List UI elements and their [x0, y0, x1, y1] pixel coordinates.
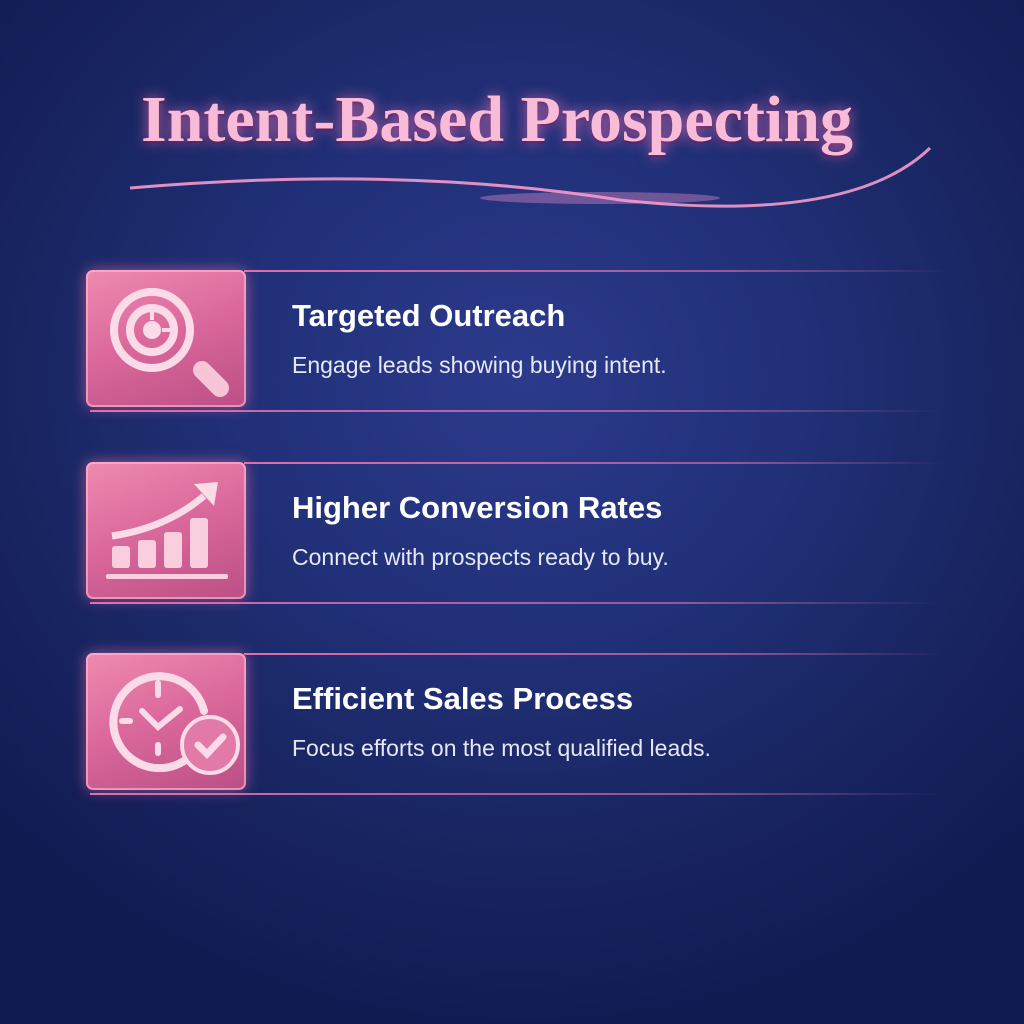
icon: magnifier target — [86, 270, 246, 407]
icon: clock check — [86, 653, 246, 790]
title swoosh — [130, 146, 931, 208]
title: Intent-Based Prospecting — [141, 83, 853, 156]
row: efficient sales — [76, 643, 929, 800]
text: Engage leads showing buying intent. — [292, 352, 667, 378]
icon: bar chart — [86, 462, 246, 599]
text: Focus efforts on the most qualified leads. — [292, 735, 711, 761]
row: higher conversion — [76, 452, 929, 609]
text: Connect with prospects ready to buy. — [292, 544, 669, 570]
heading: Higher Conversion Rates — [292, 490, 662, 525]
heading: Targeted Outreach — [292, 298, 565, 333]
row: targeted outreach — [76, 260, 929, 416]
heading: Efficient Sales Process — [292, 681, 633, 716]
